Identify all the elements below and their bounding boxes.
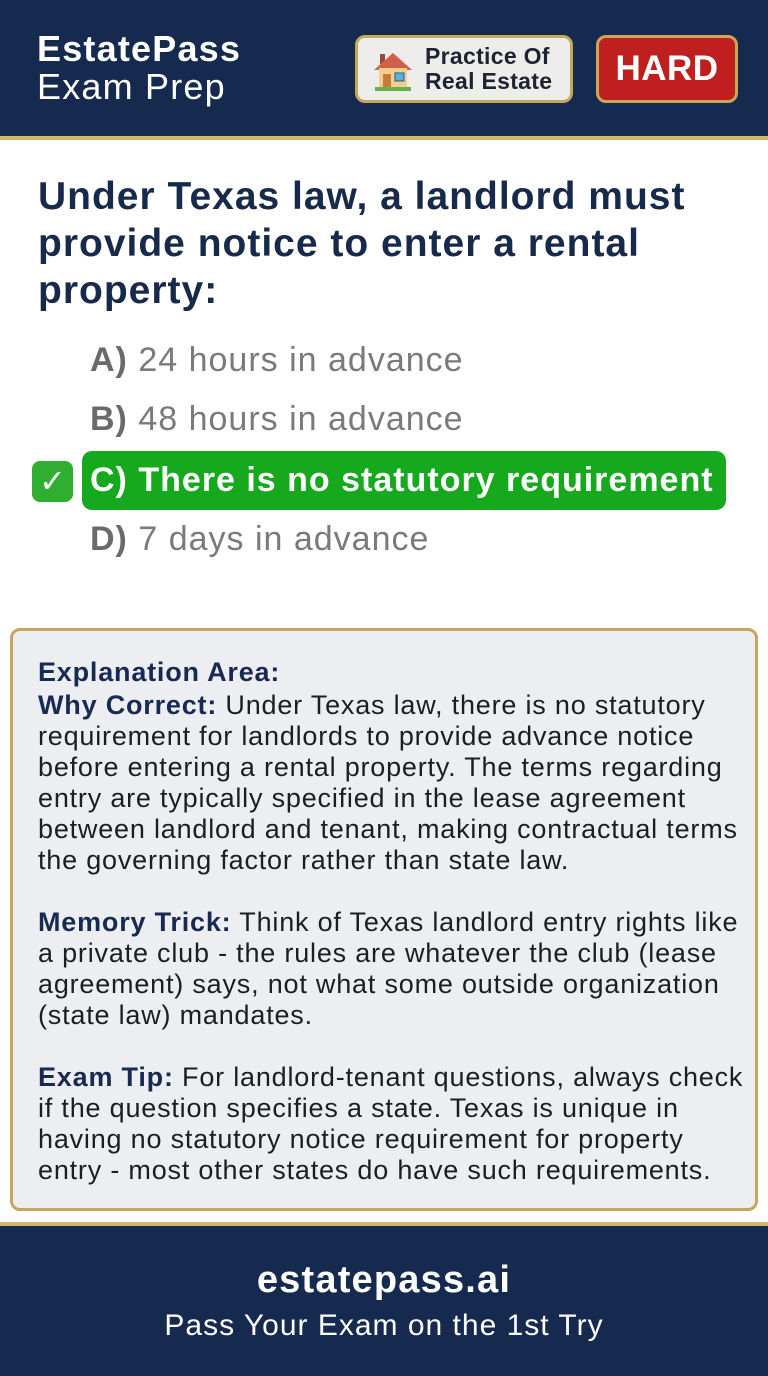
badge: category [355, 35, 573, 103]
option C correct [82, 451, 726, 510]
brand logo text: EstatePass [37, 28, 241, 69]
question title [38, 175, 686, 312]
memory trick: (state law) mandates. [38, 1000, 313, 1030]
badge text: Practice Of [425, 43, 550, 69]
memory trick [38, 907, 738, 1030]
badge: difficulty [596, 35, 738, 103]
question title: property: [38, 269, 218, 312]
option A: A) 24 hours in advance [90, 341, 464, 379]
why correct: Why Correct: Under Texas law, there is no statutory [38, 690, 706, 720]
header bar [0, 0, 768, 137]
memory trick: Memory Trick: Think of Texas landlord entry rights like [38, 907, 738, 937]
footer tagline: Pass Your Exam on the 1st Try [164, 1309, 604, 1342]
icon: check [32, 461, 73, 502]
option D: D) 7 days in advance [90, 520, 429, 558]
badge text [425, 43, 552, 94]
badge text: Real Estate [425, 68, 552, 94]
why correct: requirement for landlords to provide advance notice [38, 721, 694, 751]
why correct [38, 690, 738, 875]
option B: B) 48 hours in advance [90, 400, 464, 438]
exam tip: entry - most other states do have such requirements. [38, 1155, 711, 1185]
icon: house [374, 53, 412, 91]
badge: difficulty: HARD [615, 49, 719, 88]
footer site: estatepass.ai [257, 1259, 511, 1301]
panel: explanation [10, 628, 758, 1211]
question title: Under Texas law, a landlord must [38, 175, 686, 218]
exam tip: having no statutory notice requirement for property [38, 1124, 684, 1154]
footer [0, 1226, 768, 1376]
exam tip: if the question specifies a state. Texas is unique in [38, 1093, 679, 1123]
question title: provide notice to enter a rental [38, 222, 640, 265]
exam tip: Exam Tip: For landlord-tenant questions, always check [38, 1062, 743, 1092]
why correct: the governing factor rather than state law. [38, 845, 569, 875]
why correct: before entering a rental property. The terms regarding [38, 752, 723, 782]
why correct: between landlord and tenant, making contractual terms [38, 814, 738, 844]
brand logo text [37, 28, 241, 107]
option C correct: C) There is no statutory requirement [90, 461, 714, 499]
brand logo text: Exam Prep [37, 66, 226, 107]
exam tip [38, 1062, 743, 1185]
memory trick: a private club - the rules are whatever the club (lease [38, 938, 717, 968]
why correct: entry are typically specified in the lease agreement [38, 783, 686, 813]
explanation heading: Explanation Area: [38, 657, 280, 687]
memory trick: agreement) says, not what some outside organization [38, 969, 720, 999]
icon: check: ✓ [39, 463, 66, 499]
